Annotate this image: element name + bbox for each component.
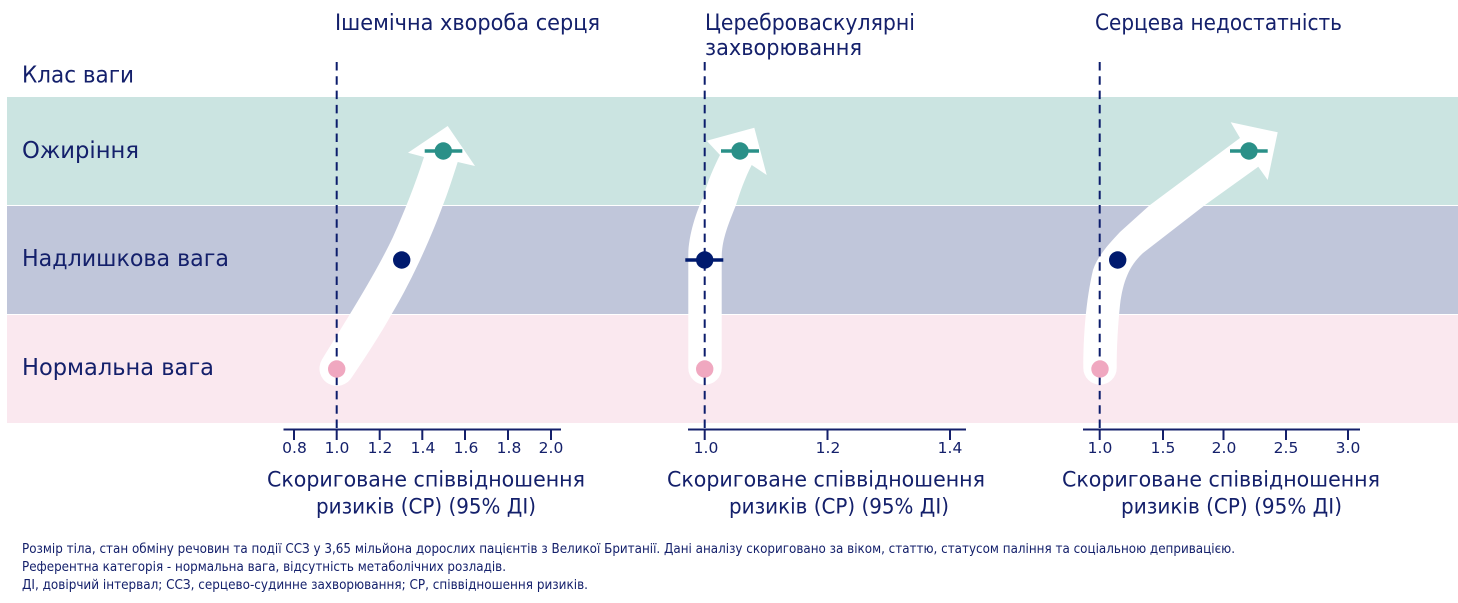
point: normal weight xyxy=(696,360,713,378)
axis: hazard ratio 1.0 to 1.4: 1.4 xyxy=(938,439,962,457)
band: normal weight row background xyxy=(7,315,1458,423)
row label: obesity: Ожиріння xyxy=(22,136,139,164)
point: overweight xyxy=(1109,251,1126,269)
axis: hazard ratio 0.8 to 2.0: 1.4 xyxy=(411,439,435,457)
axis: hazard ratio 1.0 to 3.0 xyxy=(1083,430,1360,457)
axis: hazard ratio 1.0 to 3.0: 2.0 xyxy=(1212,439,1236,457)
axis title: ризиків (СР) (95% ДІ) xyxy=(729,494,949,520)
axis: hazard ratio 0.8 to 2.0 xyxy=(282,430,563,457)
band: obesity row background xyxy=(7,97,1458,205)
arrow: trend ischaemic heart disease xyxy=(319,126,475,386)
heading: cerebrovascular disease: Цереброваскулярні xyxy=(705,10,915,36)
axis title: ризиків (СР) (95% ДІ) xyxy=(1121,494,1342,520)
axis: hazard ratio 0.8 to 2.0: 1.0 xyxy=(325,439,349,457)
heading: weight class: Клас ваги xyxy=(22,60,134,88)
axis title xyxy=(667,468,985,520)
point: obesity with confidence interval xyxy=(425,142,462,160)
axis: hazard ratio 1.0 to 3.0: 3.0 xyxy=(1336,439,1360,457)
footnotes: Розмір тіла, стан обміну речовин та події ССЗ у 3,65 мільйона дорослих пацієнтів з Великої Британії. Дані аналізу скориговано за віком, статтю, статусом паління та соціальною депривацією. xyxy=(22,541,1235,557)
reference line xyxy=(336,62,338,429)
axis title xyxy=(1062,468,1380,520)
row label: overweight: Надлишкова вага xyxy=(22,244,229,272)
point: overweight xyxy=(393,251,410,269)
panel: heart failure xyxy=(1062,10,1380,520)
axis title xyxy=(267,468,585,520)
band: overweight row background xyxy=(7,206,1458,314)
point: normal weight xyxy=(328,360,345,378)
axis title: ризиків (СР) (95% ДІ) xyxy=(316,494,536,520)
axis: hazard ratio 1.0 to 3.0: 2.5 xyxy=(1274,439,1298,457)
axis title: Скориговане співвідношення xyxy=(667,468,985,492)
point: overweight with confidence interval xyxy=(685,251,723,269)
point: obesity with confidence interval xyxy=(721,142,759,160)
panel: ischaemic heart disease xyxy=(267,10,600,520)
axis: hazard ratio 1.0 to 1.4: 1.0 xyxy=(694,439,718,457)
axis: hazard ratio 1.0 to 1.4: 1.2 xyxy=(816,439,840,457)
axis: hazard ratio 0.8 to 2.0: 0.8 xyxy=(282,439,307,457)
heading: cerebrovascular disease xyxy=(705,10,915,61)
heading: heart failure: Серцева недостатність xyxy=(1095,10,1342,36)
axis: hazard ratio 0.8 to 2.0: 1.8 xyxy=(497,439,521,457)
row label: normal weight: Нормальна вага xyxy=(22,353,214,381)
axis: hazard ratio 0.8 to 2.0: 1.6 xyxy=(454,439,478,457)
arrow: trend heart failure xyxy=(1083,122,1278,385)
heading: ischaemic heart disease: Ішемічна хвороба серця xyxy=(335,10,600,36)
footnotes xyxy=(22,541,1235,593)
footnotes: ДІ, довірчий інтервал; ССЗ, серцево-судинне захворювання; СР, співвідношення ризиків. xyxy=(22,577,588,593)
reference line xyxy=(704,62,706,429)
axis title: Скориговане співвідношення xyxy=(267,468,585,492)
reference line xyxy=(1099,62,1101,429)
axis title: Скориговане співвідношення xyxy=(1062,468,1380,492)
point: obesity with confidence interval xyxy=(1230,142,1268,160)
axis: hazard ratio 0.8 to 2.0: 1.2 xyxy=(368,439,392,457)
axis: hazard ratio 1.0 to 3.0: 1.0 xyxy=(1088,439,1112,457)
point: normal weight xyxy=(1091,360,1109,378)
arrow: trend cerebrovascular disease xyxy=(688,128,767,385)
heading: cerebrovascular disease: захворювання xyxy=(705,35,862,61)
footnotes: Референтна категорія - нормальна вага, відсутність метаболічних розладів. xyxy=(22,559,506,575)
axis: hazard ratio 0.8 to 2.0: 2.0 xyxy=(539,439,563,457)
panel: cerebrovascular disease xyxy=(667,10,985,520)
axis: hazard ratio 1.0 to 3.0: 1.5 xyxy=(1151,439,1175,457)
axis: hazard ratio 1.0 to 1.4 xyxy=(688,430,966,457)
